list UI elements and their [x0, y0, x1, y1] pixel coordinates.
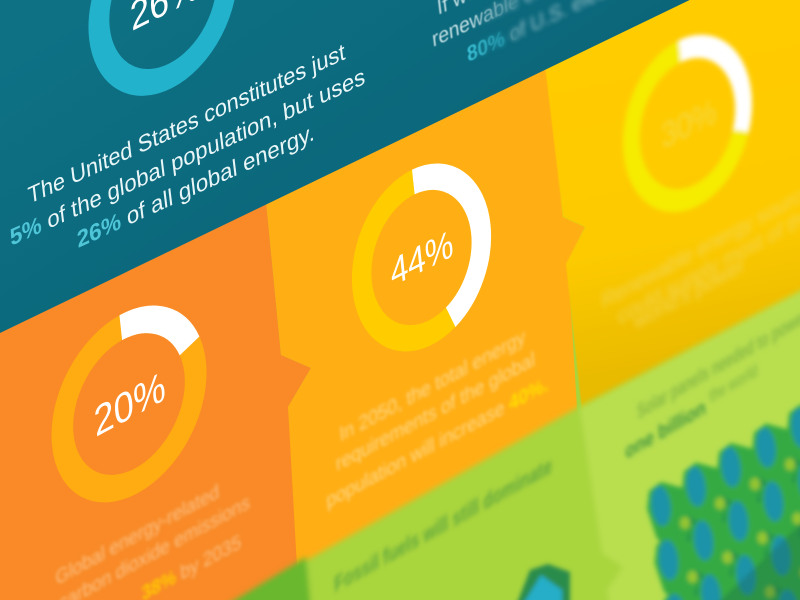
panel: amber column: [263, 40, 590, 600]
panel: green section: [215, 283, 800, 600]
label: 30 percent: 30%: [660, 91, 718, 156]
text: 2050 energy statistic: In 2050, the total energy: [339, 325, 526, 447]
ring: 20 percent: [55, 291, 203, 517]
text: 2050 energy statistic: requirements of the global: [335, 348, 536, 476]
text: bold figure: one billion: [624, 396, 707, 464]
icon: solar tile grid: [647, 404, 800, 600]
ring: 26 percent: [92, 0, 234, 108]
panel: yellow column: [542, 0, 800, 420]
text: US energy statistic: 5% of the global population, but uses: [8, 62, 366, 251]
text: US energy statistic: 26% of all global energy.: [75, 118, 316, 253]
text: yellow panel statistic, out of focus: world's power: [632, 252, 745, 335]
text: US energy statistic: The United States constitutes just: [26, 38, 347, 209]
text: 2050 energy statistic: population will increase 40%.: [325, 373, 549, 513]
panel: orange column: [0, 170, 312, 600]
label: 44 percent: 44%: [388, 221, 455, 295]
label: 20 percent: 20%: [92, 362, 167, 446]
panel: teal background: [0, 0, 800, 336]
text: green panel heading right: the world: [708, 360, 758, 407]
text: green panel heading left: Fossil fuels will still dominate: [333, 454, 553, 597]
text: renewable statistic, out of focus: [432, 0, 606, 61]
ring: 44 percent: [354, 153, 489, 362]
icon: house or panel at bottom: [516, 564, 570, 600]
text: emissions statistic: Global energy-related: [55, 480, 220, 590]
ring: 30 percent, out of focus: [625, 25, 750, 222]
text: green panel heading right: [624, 305, 800, 464]
